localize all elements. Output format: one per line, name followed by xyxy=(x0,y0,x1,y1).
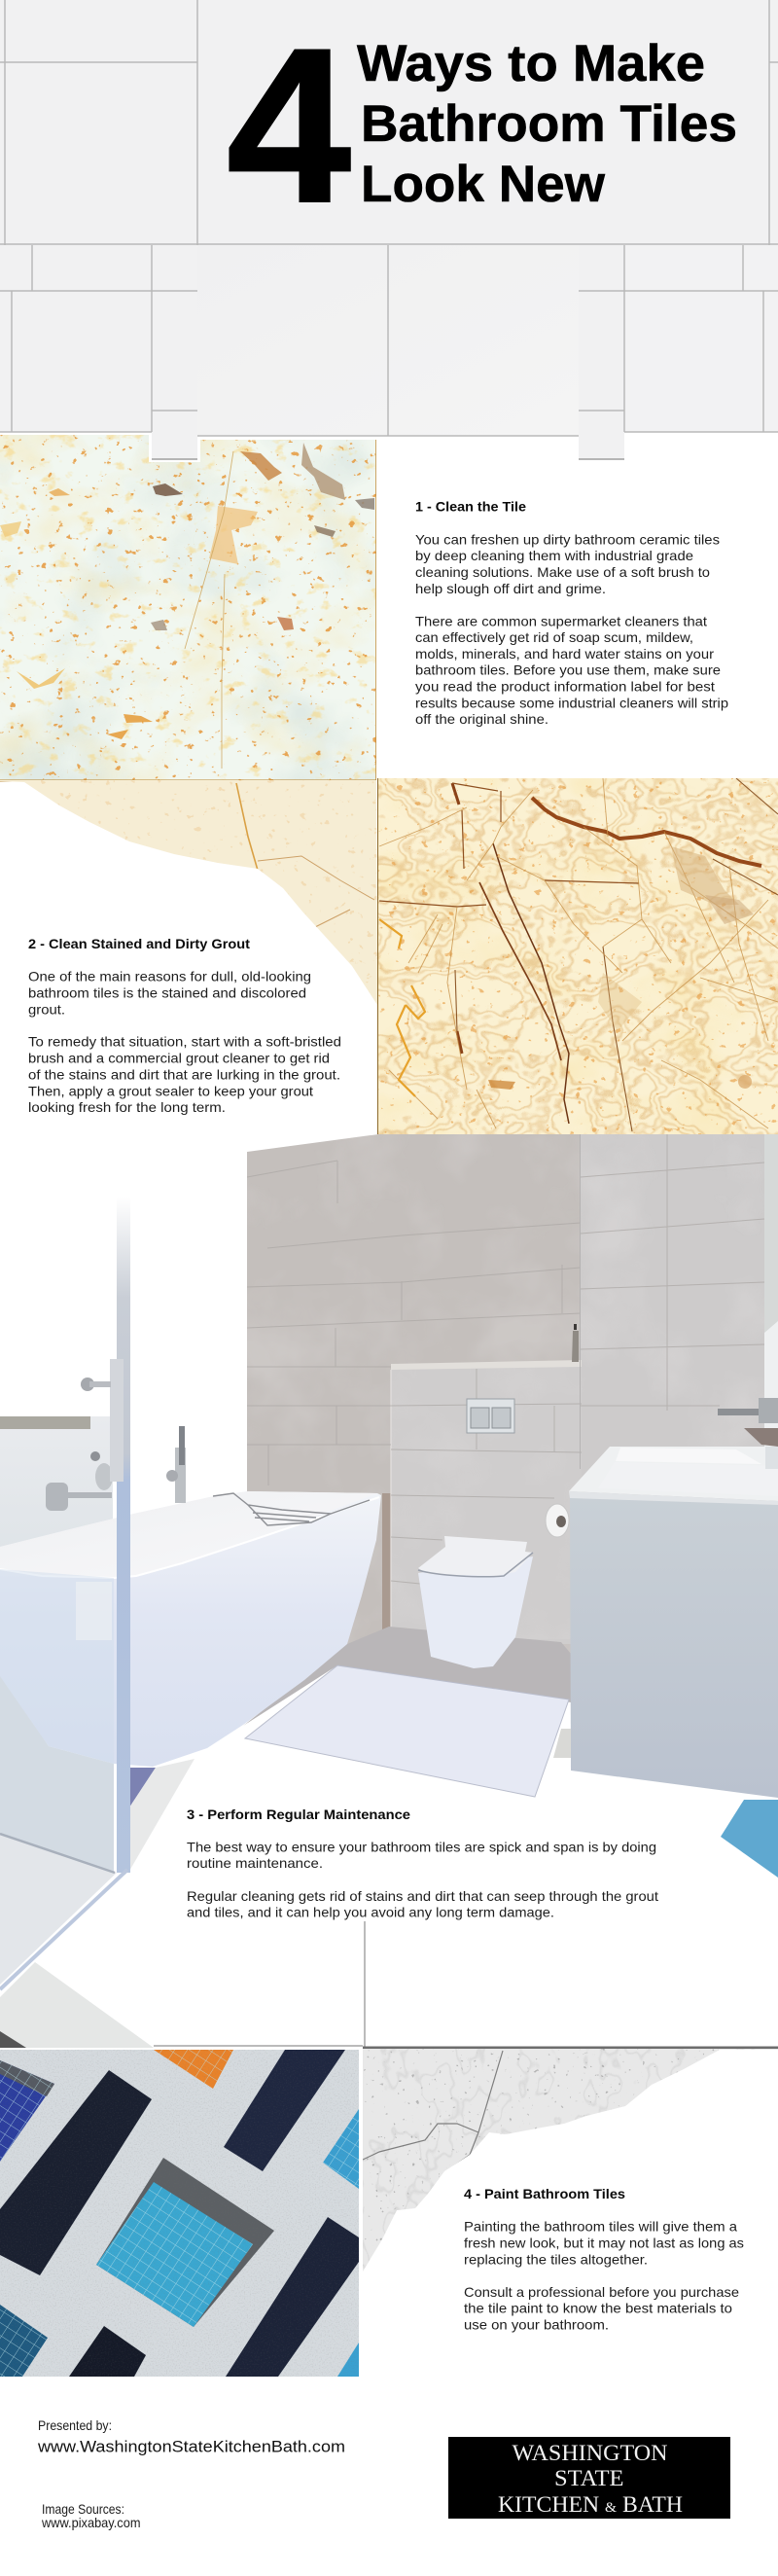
footer: image sources: Image Sources: xyxy=(42,2501,124,2517)
title: heading lines: Bathroom Tiles xyxy=(361,95,737,153)
shower sill xyxy=(0,1834,115,1873)
panel: 2 - Clean Stained and Dirty Grout: looking fresh for the long term. xyxy=(28,1099,226,1115)
title: heading lines xyxy=(357,35,737,213)
panel: 4 - Paint Bathroom Tiles: Painting the bathroom tiles will give them a xyxy=(464,2219,737,2235)
panel: 2 - Clean Stained and Dirty Grout: To remedy that situation, start with a soft-bristled xyxy=(28,1034,341,1050)
panel: 1 - Clean the Tile: off the original shine. xyxy=(415,711,548,727)
concrete strip with mosaic xyxy=(128,1759,194,1873)
title: big number 4: 4 xyxy=(227,2,351,248)
shower floor xyxy=(0,1834,117,1985)
panel: 4 - Paint Bathroom Tiles: Consult a professional before you purchase xyxy=(464,2284,739,2300)
panel: 1 - Clean the Tile: results because some industrial cleaners will strip xyxy=(415,695,728,710)
panel: 1 - Clean the Tile: 1 - Clean the Tile xyxy=(415,499,526,515)
footer: presented by xyxy=(37,2417,345,2456)
panel: 2 - Clean Stained and Dirty Grout: One of the main reasons for dull, old-looking xyxy=(28,968,311,984)
bathroom floor xyxy=(243,1627,571,1726)
toilet paper xyxy=(546,1504,569,1537)
bathroom walls xyxy=(247,1134,778,1660)
footer: presented by: www.WashingtonStateKitchenBath.com xyxy=(37,2438,345,2456)
tub basket xyxy=(213,1493,370,1525)
panel: 2 - Clean Stained and Dirty Grout xyxy=(28,936,341,1115)
panel: 4 - Paint Bathroom Tiles: the tile paint to know the best materials to xyxy=(464,2300,732,2315)
panel: 2 - Clean Stained and Dirty Grout: brush and a commercial grout cleaner to get rid xyxy=(28,1051,330,1066)
flush plate xyxy=(467,1399,514,1433)
panel: 3 - Perform Regular Maintenance: routine maintenance. xyxy=(187,1855,323,1871)
panel: white tile header xyxy=(0,0,778,460)
shower floor behind glass xyxy=(0,1673,114,1873)
footer: image sources xyxy=(41,2501,141,2530)
logo: Washington State Kitchen & Bath: WASHINGTON xyxy=(512,2441,668,2465)
concrete floor corner xyxy=(0,1962,154,2048)
panel: 3 - Perform Regular Maintenance: Regular cleaning gets rid of stains and dirt that can seep through the grout xyxy=(187,1888,658,1904)
panel: 3 - Perform Regular Maintenance xyxy=(187,1807,658,1920)
panel: 2 - Clean Stained and Dirty Grout: of the stains and dirt that are lurking in the grout. xyxy=(28,1066,340,1082)
tile strip over marble xyxy=(152,459,197,461)
panel: 4 - Paint Bathroom Tiles: use on your bathroom. xyxy=(464,2316,609,2332)
bath mat xyxy=(245,1665,569,1797)
image: geometric mosaic wall xyxy=(0,2050,359,2377)
panel: 1 - Clean the Tile: You can freshen up dirty bathroom ceramic tiles xyxy=(415,531,720,547)
image: cracked concrete xyxy=(363,2047,778,2280)
taps xyxy=(718,1398,778,1469)
panel: 2 - Clean Stained and Dirty Grout: grout. xyxy=(28,1001,65,1017)
panel: 4 - Paint Bathroom Tiles: 4 - Paint Bathroom Tiles xyxy=(464,2186,625,2201)
shower wall xyxy=(0,1416,113,1556)
shower frame xyxy=(0,1197,130,1989)
panel: 3 - Perform Regular Maintenance: and tiles, and it can help you avoid any long term damage. xyxy=(187,1905,554,1920)
panel: 3 - Perform Regular Maintenance: 3 - Perform Regular Maintenance xyxy=(187,1807,410,1822)
title: heading lines: Look New xyxy=(361,156,606,213)
marble vertical grout line xyxy=(377,778,379,1134)
toilet xyxy=(418,1536,533,1668)
logo: Washington State Kitchen & Bath xyxy=(448,2437,730,2519)
panel: 4 - Paint Bathroom Tiles: replacing the tiles altogether. xyxy=(464,2251,648,2267)
panel: 1 - Clean the Tile: can effectively get rid of soap scum, mildew, xyxy=(415,629,693,645)
panel: 1 - Clean the Tile: There are common supermarket cleaners that xyxy=(415,613,707,628)
panel: 1 - Clean the Tile: molds, minerals, and hard water stains on your xyxy=(415,646,714,662)
footer: presented by: Presented by: xyxy=(38,2417,112,2433)
image: veined marble tile xyxy=(378,778,778,1134)
vanity xyxy=(569,1447,778,1798)
bath tub xyxy=(0,1491,381,1767)
logo: Washington State Kitchen & Bath: KITCHEN & BATH xyxy=(498,2492,683,2517)
panel: 1 - Clean the Tile: bathroom tiles. Before you use them, make sure xyxy=(415,662,721,678)
dark corner xyxy=(0,2031,26,2048)
image: blue mosaic tile fragment xyxy=(721,1800,778,1878)
tub through glass tint xyxy=(0,1569,114,1764)
panel: 1 - Clean the Tile: you read the product information label for best xyxy=(415,679,715,695)
concrete top edge xyxy=(363,2047,778,2049)
panel: 4 - Paint Bathroom Tiles xyxy=(464,2186,744,2332)
image: bathroom scene xyxy=(0,1134,778,1989)
hand shower xyxy=(166,1426,186,1503)
marble grout line xyxy=(0,780,376,782)
towel bar xyxy=(0,1416,90,1429)
wall faucet xyxy=(46,1451,113,1511)
logo: Washington State Kitchen & Bath: STATE xyxy=(554,2466,624,2490)
panel: 2 - Clean Stained and Dirty Grout: Then, apply a grout sealer to keep your grout xyxy=(28,1083,313,1098)
tile grout lines xyxy=(154,1921,365,2049)
panel: 2 - Clean Stained and Dirty Grout: bathroom tiles is the stained and discolored xyxy=(28,984,306,1000)
panel: 1 - Clean the Tile: by deep cleaning them with industrial grade xyxy=(415,548,693,563)
panel: 3 - Perform Regular Maintenance: The best way to ensure your bathroom tiles are spick and span is by doing xyxy=(187,1839,656,1854)
panel: 1 - Clean the Tile: cleaning solutions. Make use of a soft brush to xyxy=(415,564,710,580)
title: heading lines: Ways to Make xyxy=(357,35,705,92)
stone patch xyxy=(553,1729,571,1758)
panel: 1 - Clean the Tile xyxy=(415,499,728,727)
panel: 4 - Paint Bathroom Tiles: fresh new look, but it may not last as long as xyxy=(464,2235,744,2250)
image: torn marble edge xyxy=(0,780,379,1014)
footer: image sources: www.pixabay.com xyxy=(41,2515,141,2530)
panel: 2 - Clean Stained and Dirty Grout: 2 - Clean Stained and Dirty Grout xyxy=(28,936,250,951)
panel: 1 - Clean the Tile: help slough off dirt and grime. xyxy=(415,581,606,596)
image: pale marble tile xyxy=(0,435,376,780)
